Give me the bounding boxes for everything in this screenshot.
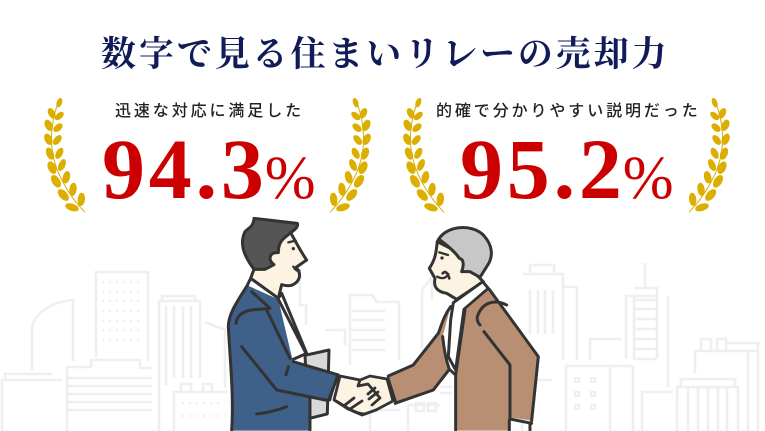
shirt <box>448 282 488 370</box>
face <box>251 230 307 298</box>
folder <box>305 350 329 419</box>
stat: 94.3%: 94.3% <box>102 121 316 217</box>
man in navy suit <box>228 218 338 431</box>
facial features <box>437 252 448 278</box>
hair <box>437 227 491 277</box>
laurel 2 right <box>688 97 732 213</box>
suit <box>388 289 538 431</box>
label: clear explanation: 的確で分かりやすい説明だった <box>436 103 701 120</box>
man in brown suit <box>386 227 538 431</box>
laurel 1 right <box>329 97 373 213</box>
facial features <box>288 241 299 271</box>
stat: 95.2%: 95.2% <box>460 121 674 217</box>
laurel 1 left <box>42 97 86 213</box>
hair <box>242 218 298 269</box>
handshake hands <box>330 376 396 415</box>
laurel 2 left <box>401 97 445 213</box>
shirt <box>247 278 307 360</box>
suit <box>228 285 338 431</box>
face <box>429 242 483 299</box>
title: 数字で見る住まいリレーの売却力 <box>101 35 670 74</box>
label: quick response: 迅速な対応に満足した <box>115 103 304 120</box>
